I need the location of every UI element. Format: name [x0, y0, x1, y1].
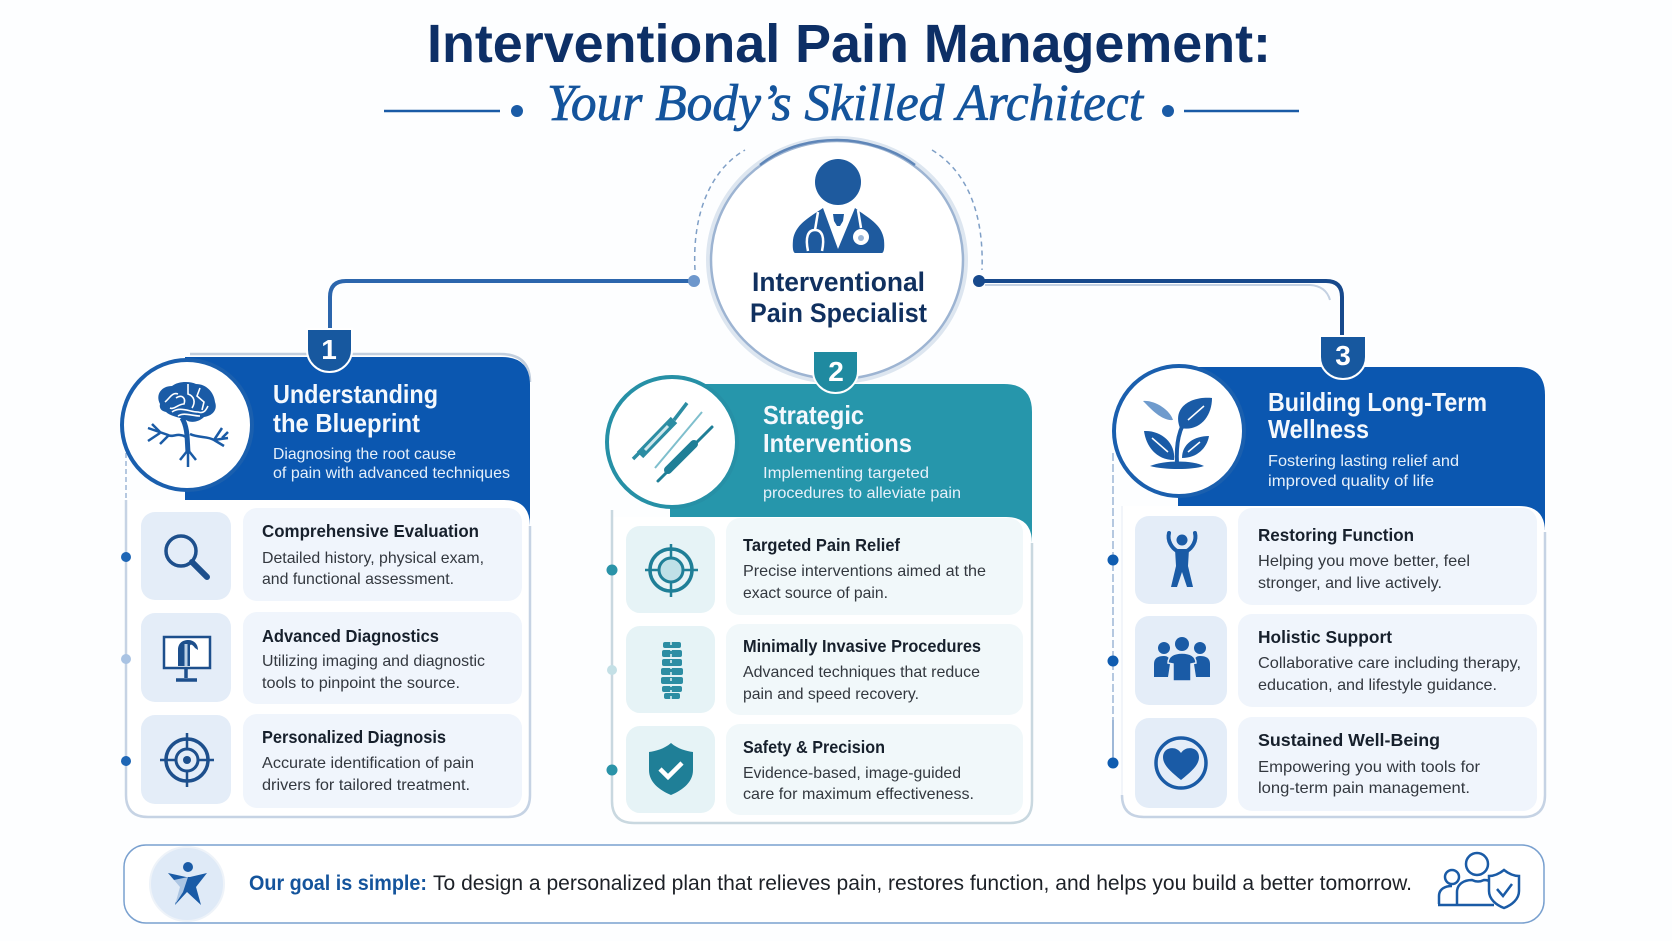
item: Targeted Pain Relief	[626, 518, 1023, 615]
item: Advanced Diagnostics: tools to pinpoint the source.	[262, 675, 460, 692]
item: Restoring Function: stronger, and live actively.	[1258, 575, 1442, 592]
panel header	[185, 357, 530, 530]
timeline	[606, 564, 618, 776]
icon: doctor	[793, 159, 884, 253]
item: Minimally Invasive Procedures: Advanced techniques that reduce	[743, 664, 980, 681]
panel: Understanding the Blueprint: of pain with advanced techniques	[273, 465, 510, 482]
item: Restoring Function: Restoring Function	[1258, 525, 1414, 545]
icon: plant	[1114, 366, 1244, 496]
item: Sustained Well-Being: long-term pain management.	[1258, 780, 1470, 797]
badge 2	[813, 351, 858, 393]
item: Targeted Pain Relief: exact source of pain.	[743, 585, 888, 602]
item: Targeted Pain Relief: Targeted Pain Relief	[743, 535, 900, 555]
item: Restoring Function: Helping you move better, feel	[1258, 553, 1470, 570]
connector: specialist to step 3	[973, 275, 1342, 340]
panel: Building Long-Term Wellness	[1108, 336, 1545, 817]
item: Restoring Function	[1135, 508, 1537, 605]
item: Targeted Pain Relief: Precise interventions aimed at the	[743, 563, 986, 580]
badge 2: 2	[828, 356, 844, 387]
connector: specialist to step 1	[330, 275, 700, 335]
footer callout: Our goal is simple:	[249, 872, 427, 895]
item: Safety & Precision: Safety & Precision	[743, 737, 885, 757]
item: Sustained Well-Being: Empowering you with tools for	[1258, 759, 1481, 776]
item: Advanced Diagnostics: Advanced Diagnostics	[262, 626, 439, 646]
item: Advanced Diagnostics	[141, 612, 522, 704]
footer callout	[124, 845, 1544, 923]
badge 1	[307, 329, 352, 372]
title	[384, 14, 1299, 132]
panel: Understanding the Blueprint: Diagnosing the root cause	[273, 446, 456, 463]
icon: brain with roots	[122, 360, 252, 490]
central circle: Interventional Pain Specialist	[695, 139, 982, 381]
panel: Understanding the Blueprint: Understanding	[273, 379, 438, 409]
icon: people with shield	[1438, 853, 1519, 908]
item: Comprehensive Evaluation: Detailed history, physical exam,	[262, 550, 484, 567]
panel: Building Long-Term Wellness: Fostering lasting relief and	[1268, 453, 1459, 470]
badge 1: 1	[321, 334, 337, 365]
item: Sustained Well-Being	[1135, 717, 1537, 811]
panel: Strategic Interventions	[606, 351, 1032, 823]
item: Comprehensive Evaluation	[141, 508, 522, 601]
central circle: Interventional Pain Specialist: Pain Specialist	[750, 298, 927, 328]
item: Safety & Precision: Evidence-based, image-guided	[743, 765, 961, 782]
item: Personalized Diagnosis: drivers for tailored treatment.	[262, 777, 470, 794]
panel: Building Long-Term Wellness: Wellness	[1268, 414, 1369, 444]
item: Comprehensive Evaluation: and functional assessment.	[262, 571, 454, 588]
panel: Strategic Interventions: Strategic	[763, 400, 864, 430]
panel: Building Long-Term Wellness: improved quality of life	[1268, 473, 1434, 490]
panel: Understanding the Blueprint: the Blueprint	[273, 408, 420, 438]
footer callout: To design a personalized plan that relieves pain, restores function, and helps you build a better tomorrow.	[433, 872, 1412, 895]
title: Interventional Pain Management:	[427, 14, 1271, 74]
badge 3: 3	[1335, 340, 1351, 371]
timeline	[121, 453, 131, 766]
item: Holistic Support: Collaborative care including therapy,	[1258, 655, 1521, 672]
item: Holistic Support: Holistic Support	[1258, 627, 1392, 647]
item: Personalized Diagnosis: Accurate identification of pain	[262, 755, 474, 772]
panel: Strategic Interventions: Interventions	[763, 428, 912, 458]
item: Safety & Precision	[626, 724, 1023, 815]
panel header	[670, 384, 1032, 545]
panel: Strategic Interventions: procedures to alleviate pain	[763, 485, 961, 502]
item: Minimally Invasive Procedures	[626, 624, 1023, 715]
panel: Strategic Interventions: Implementing targeted	[763, 465, 929, 482]
central circle: Interventional Pain Specialist: Interventional	[752, 267, 925, 297]
badge 3	[1320, 336, 1366, 379]
item: Sustained Well-Being: Sustained Well-Being	[1258, 730, 1440, 750]
subtitle: Your Body’s Skilled Architect	[547, 75, 1145, 132]
item: Minimally Invasive Procedures: Minimally Invasive Procedures	[743, 636, 981, 656]
timeline	[1108, 453, 1118, 768]
item: Comprehensive Evaluation: Comprehensive Evaluation	[262, 521, 479, 541]
icon: syringes	[607, 377, 737, 507]
panel: Understanding the Blueprint	[121, 329, 530, 817]
item: Minimally Invasive Procedures: pain and speed recovery.	[743, 686, 919, 703]
item: Advanced Diagnostics: Utilizing imaging and diagnostic	[262, 653, 485, 670]
subtitle	[384, 75, 1299, 132]
item: Safety & Precision: care for maximum effectiveness.	[743, 786, 974, 803]
panel: Building Long-Term Wellness: Building Long-Term	[1268, 387, 1487, 417]
item: Holistic Support	[1135, 614, 1537, 707]
panel header	[1178, 367, 1545, 530]
item: Personalized Diagnosis: Personalized Diagnosis	[262, 727, 446, 747]
item: Holistic Support: education, and lifestyle guidance.	[1258, 677, 1497, 694]
item: Personalized Diagnosis	[141, 714, 522, 808]
icon: active figure	[150, 847, 224, 921]
